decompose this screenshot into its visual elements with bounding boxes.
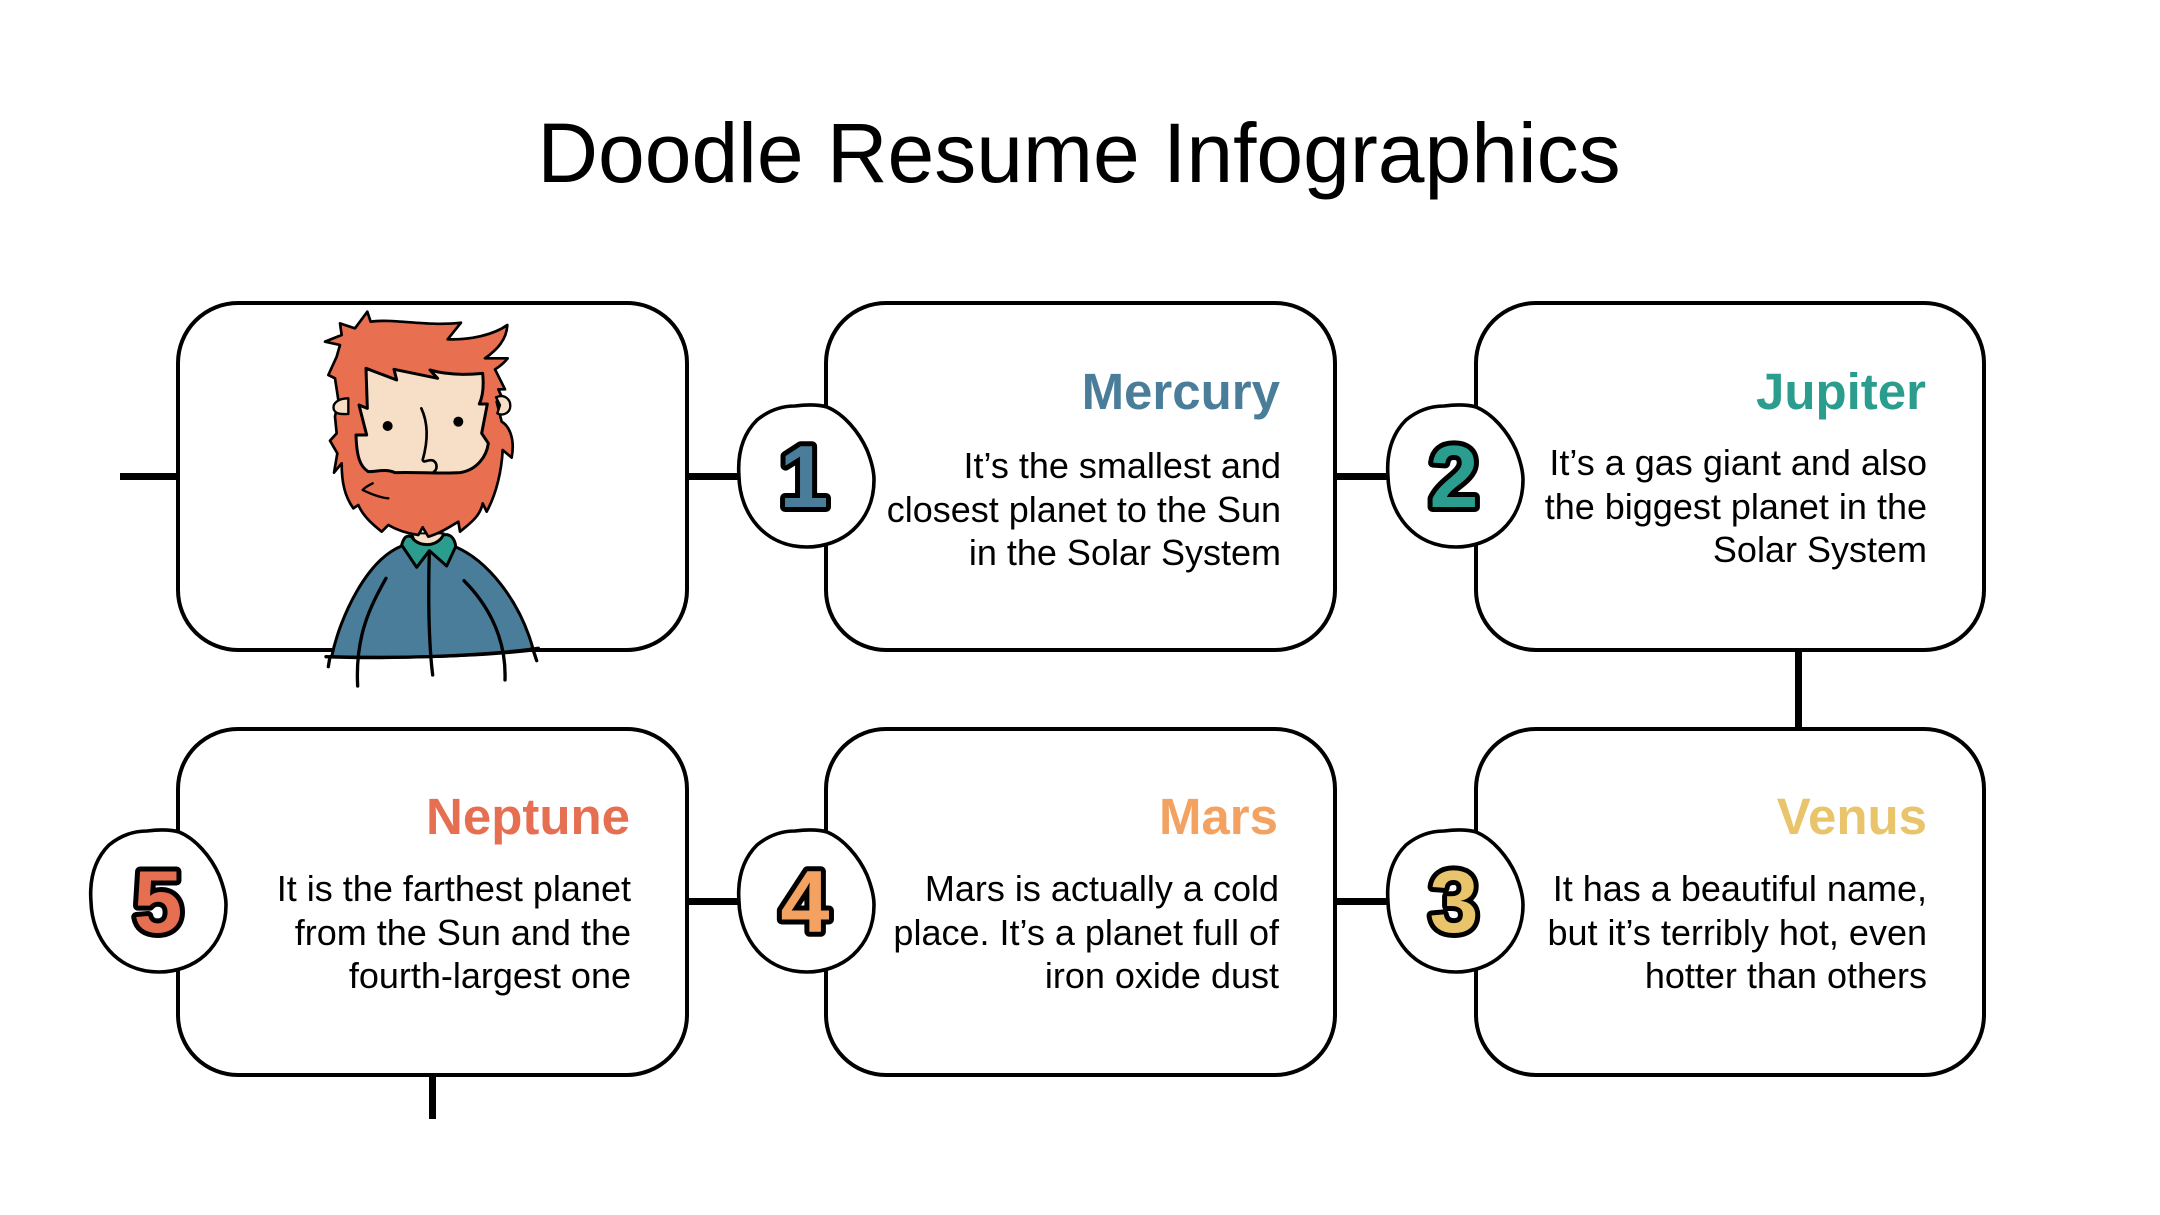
text: Mars description: place. It’s a planet full of	[893, 912, 1280, 953]
panel: Mercury	[739, 303, 1335, 650]
connector lines	[120, 473, 1802, 1119]
text: Venus description	[1547, 868, 1927, 996]
text: Neptune description	[277, 868, 631, 996]
panel: Neptune	[91, 729, 687, 1075]
text: Mars description: Mars is actually a cold	[925, 868, 1279, 909]
badge: number 4: 4	[781, 852, 830, 951]
text: Jupiter description	[1545, 442, 1927, 570]
text: Neptune description: fourth-largest one	[349, 955, 631, 996]
text: Venus description: but it’s terribly hot, even	[1547, 912, 1927, 953]
badge: number 3	[1388, 830, 1523, 972]
text: Mercury description: in the Solar System	[969, 532, 1281, 573]
heading: Neptune: Neptune	[426, 788, 630, 845]
text: Mars description: iron oxide dust	[1045, 955, 1279, 996]
panel: Jupiter	[1388, 303, 1984, 650]
badge: number 3: 3	[1430, 852, 1478, 951]
text: Jupiter description: the biggest planet in the	[1545, 486, 1927, 527]
panel: Venus	[1388, 729, 1984, 1075]
heading: Mercury: Mercury	[1082, 363, 1281, 420]
badge: number 4	[739, 830, 874, 972]
panel: Mars	[739, 729, 1335, 1075]
badge: number 1	[739, 405, 874, 547]
text: Mars description	[893, 868, 1280, 996]
badge: number 2: 2	[1430, 427, 1478, 526]
text: Venus description: hotter than others	[1645, 955, 1927, 996]
illustration: bearded man	[325, 312, 538, 686]
text: Neptune description: It is the farthest planet	[277, 868, 631, 909]
text: Mercury description	[887, 445, 1281, 573]
text: Venus description: It has a beautiful name,	[1553, 868, 1927, 909]
text: Neptune description: from the Sun and the	[295, 912, 631, 953]
badge: number 5	[91, 830, 226, 972]
heading: Jupiter: Jupiter	[1756, 363, 1926, 420]
badge: number 5: 5	[134, 852, 182, 951]
text: Mercury description: It’s the smallest and	[964, 445, 1281, 486]
text: Jupiter description: Solar System	[1713, 529, 1927, 570]
badge: number 1: 1	[780, 427, 828, 526]
text: Mercury description: closest planet to the Sun	[887, 489, 1281, 530]
title: Doodle Resume Infographics	[537, 106, 1621, 200]
heading: Mars: Mars	[1159, 788, 1278, 845]
badge: number 2	[1388, 405, 1523, 547]
heading: Venus: Venus	[1777, 788, 1927, 845]
panel: portrait	[178, 303, 687, 650]
text: Jupiter description: It’s a gas giant and also	[1549, 442, 1927, 483]
